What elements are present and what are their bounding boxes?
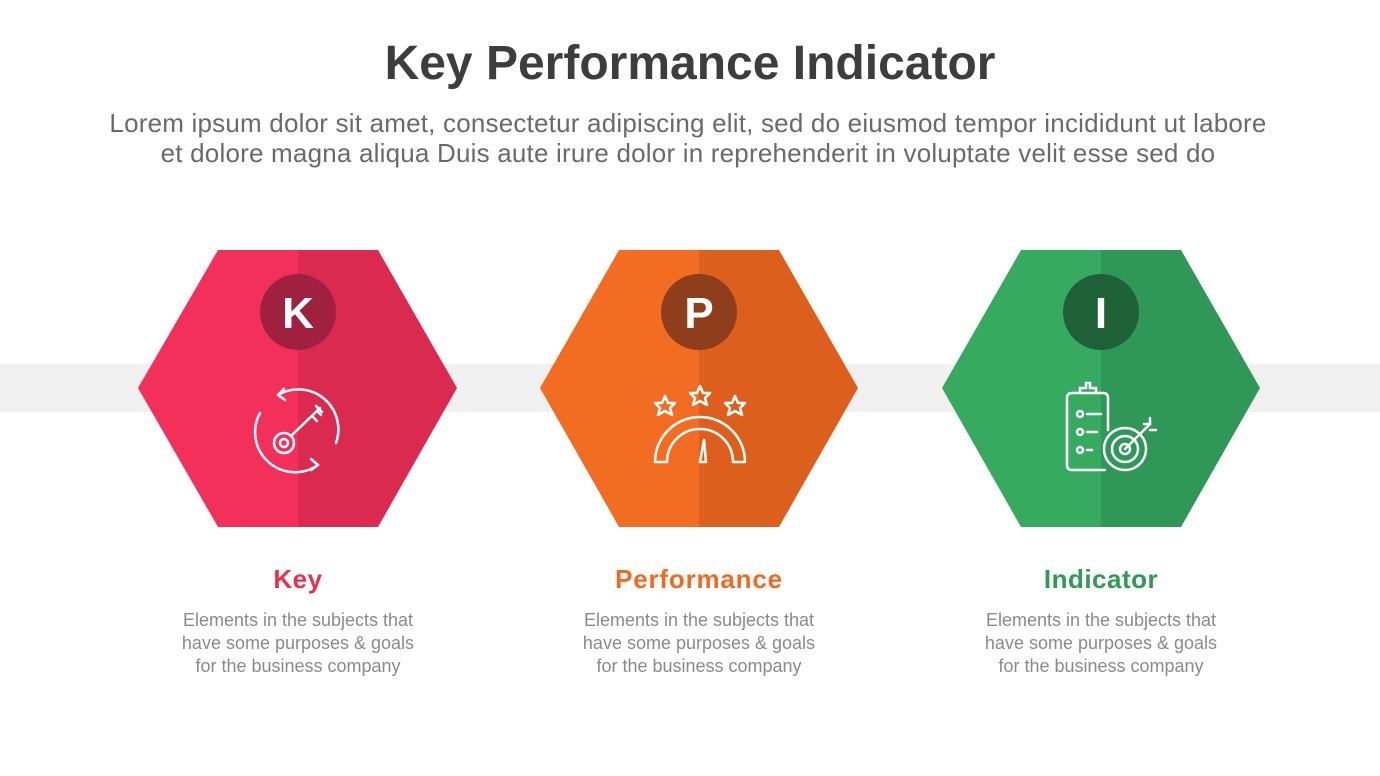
description (182, 610, 414, 676)
description: have some purposes & goals (985, 633, 1217, 653)
icon: gauge with stars (655, 386, 745, 462)
panel: Key (138, 250, 457, 676)
panel: Indicator (942, 250, 1260, 676)
description: for the business company (998, 656, 1204, 676)
description: Elements in the subjects that (986, 610, 1216, 630)
description: Elements in the subjects that (183, 610, 413, 630)
description: have some purposes & goals (182, 633, 414, 653)
subtitle: et dolore magna aliqua Duis aute irure dolor in reprehenderit in voluptate velit esse sed do (161, 138, 1215, 168)
description: for the business company (195, 656, 401, 676)
label: Performance: Performance (615, 564, 783, 594)
label: Key: Key (273, 564, 323, 594)
letter badge I (1063, 274, 1139, 350)
letter badge K: K (282, 289, 314, 338)
title: Key Performance Indicator (385, 37, 995, 90)
subtitle: Lorem ipsum dolor sit amet, consectetur adipiscing elit, sed do eiusmod tempor incididunt ut labore (109, 108, 1267, 138)
letter badge P (661, 274, 737, 350)
description (583, 610, 815, 676)
icon: clipboard with target (1067, 383, 1156, 470)
letter badge I: I (1095, 289, 1107, 338)
description: Elements in the subjects that (584, 610, 814, 630)
description: for the business company (596, 656, 802, 676)
icon: key cycle (255, 389, 338, 472)
label: Indicator: Indicator (1044, 564, 1158, 594)
subtitle (109, 108, 1267, 168)
letter badge K (260, 274, 336, 350)
description: have some purposes & goals (583, 633, 815, 653)
letter badge P: P (684, 289, 714, 338)
panel: Performance (540, 250, 858, 676)
description (985, 610, 1217, 676)
